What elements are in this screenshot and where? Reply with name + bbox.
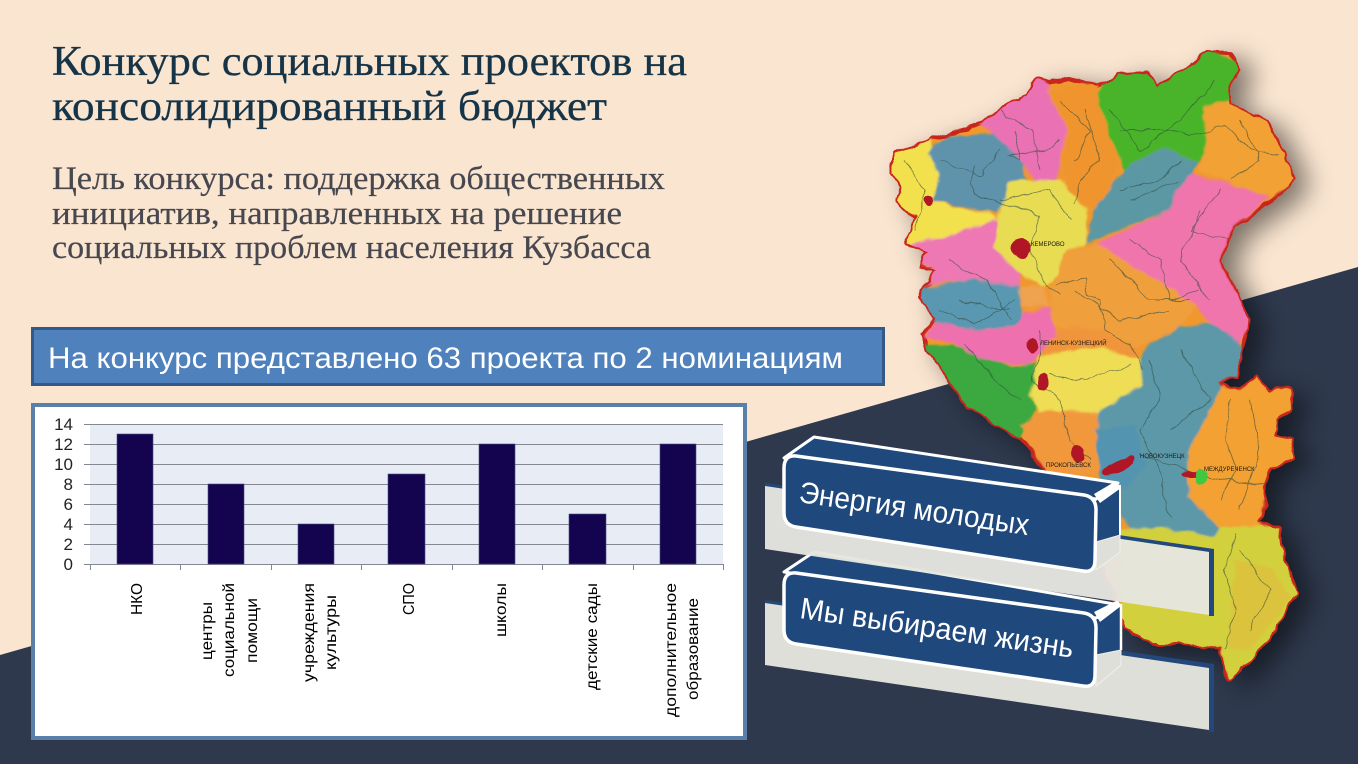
x axis labels: школы bbox=[493, 583, 510, 637]
x axis labels: детские сады bbox=[584, 583, 601, 690]
banner: 63 projects bbox=[32, 328, 884, 384]
bars bbox=[117, 434, 696, 564]
y axis labels: 12 bbox=[54, 435, 73, 454]
x axis labels: учреждения bbox=[301, 583, 318, 682]
title: консолидированный бюджет bbox=[52, 84, 607, 130]
subtitle: goal of the contest bbox=[52, 161, 666, 266]
y axis labels: 2 bbox=[64, 535, 73, 554]
x axis labels: помощи bbox=[244, 598, 261, 663]
city labels: МЕЖДУРЕЧЕНСК bbox=[1204, 467, 1255, 473]
banner: 63 projects: На конкурс представлено 63 проекта по 2 номинациям bbox=[48, 342, 843, 375]
grid lines bbox=[84, 424, 724, 570]
city labels: ЛЕНИНСК-КУЗНЕЦКИЙ bbox=[1040, 339, 1107, 347]
box: Мы выбираем жизнь bbox=[784, 552, 1121, 686]
x axis labels: образование bbox=[685, 598, 702, 700]
map of Kuzbass bbox=[887, 47, 1300, 690]
title: Конкурс социальных проектов на bbox=[52, 39, 687, 85]
x axis labels bbox=[129, 583, 702, 717]
city labels: КЕМЕРОВО bbox=[1031, 242, 1065, 248]
y axis labels: 14 bbox=[54, 415, 73, 434]
x axis labels: культуры bbox=[323, 595, 340, 670]
box: Энергия молодых bbox=[784, 437, 1121, 571]
back panel: second nomination bbox=[765, 600, 1214, 732]
back panel: first nomination bbox=[765, 483, 1214, 616]
rivers and roads texture bbox=[905, 80, 1280, 650]
plot background bbox=[90, 424, 723, 564]
subtitle: goal of the contest: инициатив, направленных на решение bbox=[52, 196, 622, 232]
x axis labels: НКО bbox=[129, 583, 146, 615]
box: Мы выбираем жизнь: Мы выбираем жизнь bbox=[798, 592, 1076, 665]
x axis labels: СПО bbox=[401, 583, 418, 615]
green town bbox=[1195, 469, 1207, 485]
y axis labels: 10 bbox=[54, 455, 73, 474]
y axis labels: 8 bbox=[64, 475, 73, 494]
title bbox=[52, 39, 687, 130]
lower districts bbox=[920, 345, 1045, 440]
subtitle: goal of the contest: Цель конкурса: поддержка общественных bbox=[52, 161, 666, 197]
city labels bbox=[1031, 242, 1255, 473]
y axis labels bbox=[54, 415, 73, 574]
y axis labels: 4 bbox=[64, 515, 73, 534]
y axis labels: 0 bbox=[64, 555, 73, 574]
x axis labels: дополнительное bbox=[663, 583, 680, 717]
y axis labels: 6 bbox=[64, 495, 73, 514]
background: dark diagonal bbox=[0, 267, 1358, 764]
city labels: ПРОКОПЬЕВСК bbox=[1046, 463, 1091, 469]
x axis labels: центры bbox=[199, 602, 216, 660]
x axis labels: социальной bbox=[221, 583, 238, 677]
subtitle: goal of the contest: социальных проблем населения Кузбасса bbox=[52, 230, 651, 266]
box: Энергия молодых: Энергия молодых bbox=[797, 476, 1031, 542]
city labels: НОВОКУЗНЕЦК bbox=[1140, 454, 1185, 460]
cities bbox=[924, 196, 1203, 479]
panel: bar chart bbox=[33, 405, 745, 738]
